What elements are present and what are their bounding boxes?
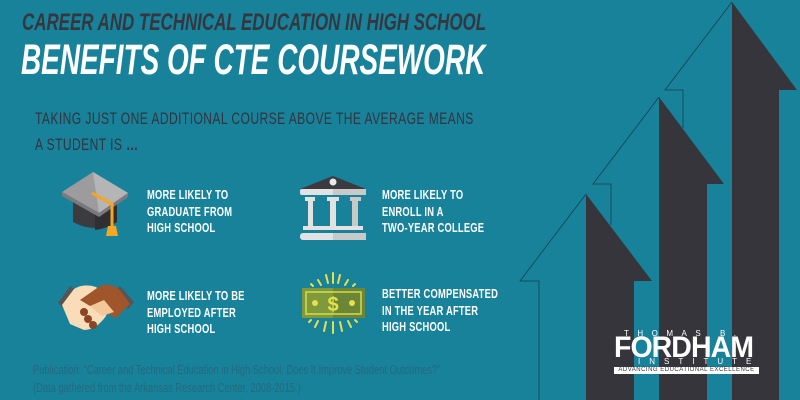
text: graduate: GRADUATE FROM bbox=[147, 204, 232, 218]
text: employed: HIGH SCHOOL bbox=[147, 321, 215, 336]
logo: Fordham Institute: FORDHAM bbox=[614, 331, 753, 364]
footer: source: (Data gathered from the Arkansas Research Center, 2008-2015.) bbox=[33, 381, 301, 395]
text: enroll: ENROLL IN A bbox=[382, 204, 444, 218]
logo: Fordham Institute: ADVANCING EDUCATIONAL EXCELLENCE bbox=[618, 367, 755, 373]
intro text bbox=[35, 109, 474, 154]
intro text: A STUDENT IS … bbox=[35, 135, 139, 154]
logo: Fordham Institute: THOMAS B. bbox=[624, 329, 745, 338]
text: compensated bbox=[382, 286, 498, 334]
icon: college building bbox=[300, 176, 366, 240]
text: employed bbox=[147, 288, 245, 336]
icon: graduation cap bbox=[62, 172, 128, 236]
text: graduate: MORE LIKELY TO bbox=[147, 187, 228, 202]
icon: money: $ bbox=[327, 294, 339, 316]
text: enroll: MORE LIKELY TO bbox=[382, 187, 463, 202]
intro text: TAKING JUST ONE ADDITIONAL COURSE ABOVE THE AVERAGE MEANS bbox=[35, 109, 474, 128]
icon: handshake bbox=[58, 284, 134, 330]
arrow: small bbox=[520, 194, 652, 400]
arrow: large bbox=[665, 2, 797, 400]
text: graduate bbox=[147, 187, 232, 235]
text: enroll: TWO-YEAR COLLEGE bbox=[382, 220, 484, 235]
icon: money bbox=[302, 272, 365, 334]
text: compensated: BETTER COMPENSATED bbox=[382, 286, 498, 301]
text: compensated: IN THE YEAR AFTER bbox=[382, 302, 478, 318]
logo: Fordham Institute: INSTITUTE bbox=[638, 357, 760, 366]
title: CAREER AND TECHNICAL EDUCATION IN HIGH SCHOOL bbox=[22, 9, 486, 36]
text: enroll bbox=[382, 187, 484, 235]
footer: source: Publication: “Career and Technical Education in High School: Does It Improve Student Outcomes?” bbox=[33, 363, 440, 377]
text: compensated: HIGH SCHOOL bbox=[382, 319, 450, 334]
logo: Fordham Institute bbox=[614, 329, 760, 374]
text: graduate: HIGH SCHOOL bbox=[147, 220, 215, 235]
text: employed: EMPLOYED AFTER bbox=[147, 304, 236, 320]
footer: source bbox=[33, 363, 440, 395]
arrow: medium bbox=[593, 97, 724, 400]
heading: BENEFITS OF CTE COURSEWORK bbox=[21, 36, 485, 84]
text: employed: MORE LIKELY TO BE bbox=[147, 288, 245, 303]
